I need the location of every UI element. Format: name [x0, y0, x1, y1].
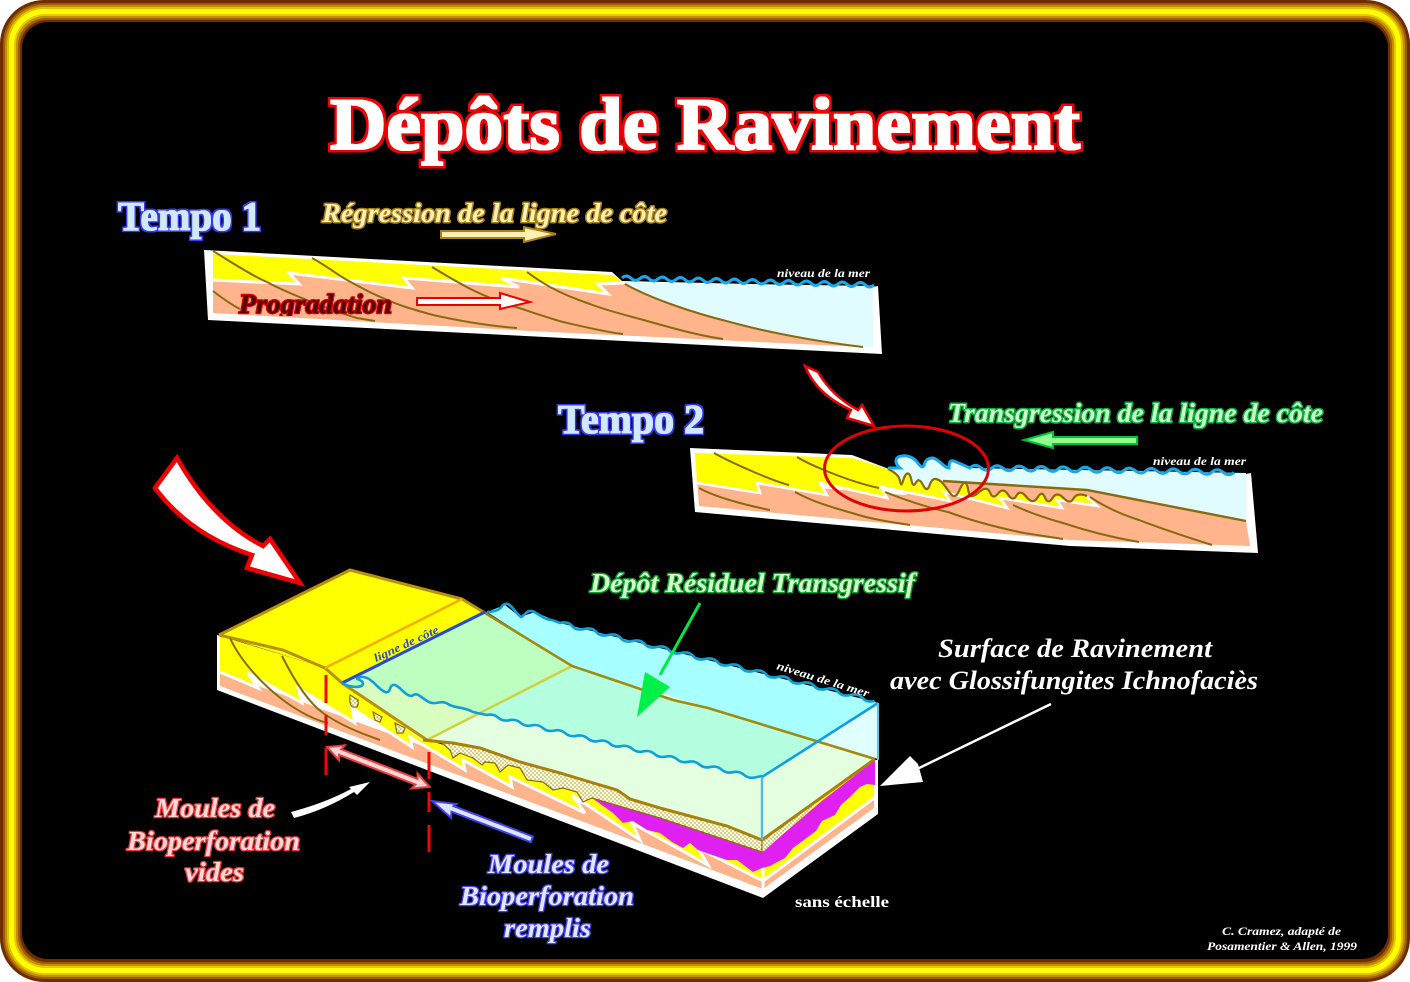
- dotted layer right: [763, 798, 823, 852]
- arrow: large curved arrow to block: [155, 458, 300, 583]
- credit: [1207, 924, 1357, 953]
- clinoforms: [230, 638, 328, 723]
- ravinement surface and burrows: [888, 469, 1087, 502]
- magenta layer right: [762, 760, 875, 868]
- yellow layer: [695, 453, 1097, 508]
- label: transgression: Transgression de la ligne de côte: [948, 398, 1323, 428]
- yellow layer front: [220, 636, 763, 881]
- label: filled burrows: [459, 849, 634, 943]
- ravinement surface lines: [423, 740, 875, 840]
- label: no scale: sans échelle: [795, 894, 889, 911]
- label: ravinement surface: Surface de Ravinement: [938, 634, 1213, 663]
- sea water: [888, 456, 1246, 521]
- back wave line: [487, 604, 875, 702]
- sea surface back: [487, 605, 878, 741]
- block base: [217, 635, 878, 898]
- label: regression: Régression de la ligne de côte: [321, 198, 667, 228]
- front water face left: [342, 666, 572, 740]
- front wave line: [342, 677, 762, 778]
- panel: Tempo 2 cross-section: [690, 448, 1258, 553]
- arrow: curved from tempo 1 to tempo 2: [805, 366, 874, 426]
- credit: C. Cramez, adapté de: [1222, 924, 1342, 938]
- dotted layer front: [442, 743, 762, 852]
- label: glossifungites: avec Glossifungites Ichnofaciès: [890, 666, 1258, 695]
- water face base: [342, 613, 875, 840]
- plateau outlines: [219, 570, 485, 635]
- submerged surface left: [345, 614, 570, 712]
- salmon layer: [220, 672, 874, 889]
- arrow: white swoosh: [291, 782, 370, 818]
- magenta layer front: [592, 798, 762, 872]
- submerged surface right: [483, 668, 814, 776]
- label: shoreline: ligne de côte: [372, 624, 441, 665]
- arrow: regression direction: [441, 227, 556, 242]
- arrow: transgression direction: [1024, 432, 1137, 448]
- label: sea level tempo 1: niveau de la mer: [777, 268, 871, 280]
- water box edges: [762, 703, 878, 777]
- right water face: [762, 741, 875, 840]
- panel: Tempo 1 cross-section: [204, 250, 882, 354]
- burrows empty and filled: [350, 695, 405, 733]
- shoreline: [342, 612, 485, 683]
- dashed markers: [326, 675, 429, 852]
- water line: [888, 456, 1234, 475]
- panel: 3D block diagram: [217, 570, 890, 898]
- label: empty burrows: Bioperforation: [126, 826, 300, 856]
- callout: red ellipse: [824, 426, 988, 511]
- arrow: filled burrows pointer: [429, 795, 534, 848]
- credit: Posamentier & Allen, 1999: [1207, 939, 1357, 953]
- water line: [622, 276, 874, 287]
- heading: Tempo 1: Tempo 1: [118, 193, 261, 239]
- heading: Tempo 2: Tempo 2: [558, 396, 704, 442]
- olive line under water: [427, 666, 572, 740]
- arrow: white to ravinement surface: [880, 704, 1051, 786]
- label: sea level tempo 2: niveau de la mer: [1153, 456, 1247, 468]
- label: empty burrows: Moules de: [154, 793, 275, 823]
- arrow: progradation direction: [417, 293, 530, 309]
- label: filled burrows: remplis: [504, 913, 591, 943]
- white sawtooth boundary: [220, 672, 874, 881]
- label: progradation: Progradation: [238, 289, 392, 319]
- label: sea level block: niveau de la mer: [775, 660, 871, 700]
- label: residual deposit: Dépôt Résiduel Transgressif: [589, 568, 918, 598]
- label: empty burrows: vides: [185, 857, 244, 887]
- salmon layer: [697, 478, 1250, 546]
- arrow: empty burrows range: [324, 740, 432, 794]
- label: empty burrows: [126, 793, 300, 887]
- title: Dépôts de Ravinement: [330, 84, 1080, 166]
- yellow top plateau: [219, 570, 485, 683]
- arrow: green to residual deposit: [637, 603, 700, 717]
- label: filled burrows: Bioperforation: [459, 881, 634, 911]
- yellow layer right: [763, 759, 875, 881]
- label: filled burrows: Moules de: [487, 849, 609, 879]
